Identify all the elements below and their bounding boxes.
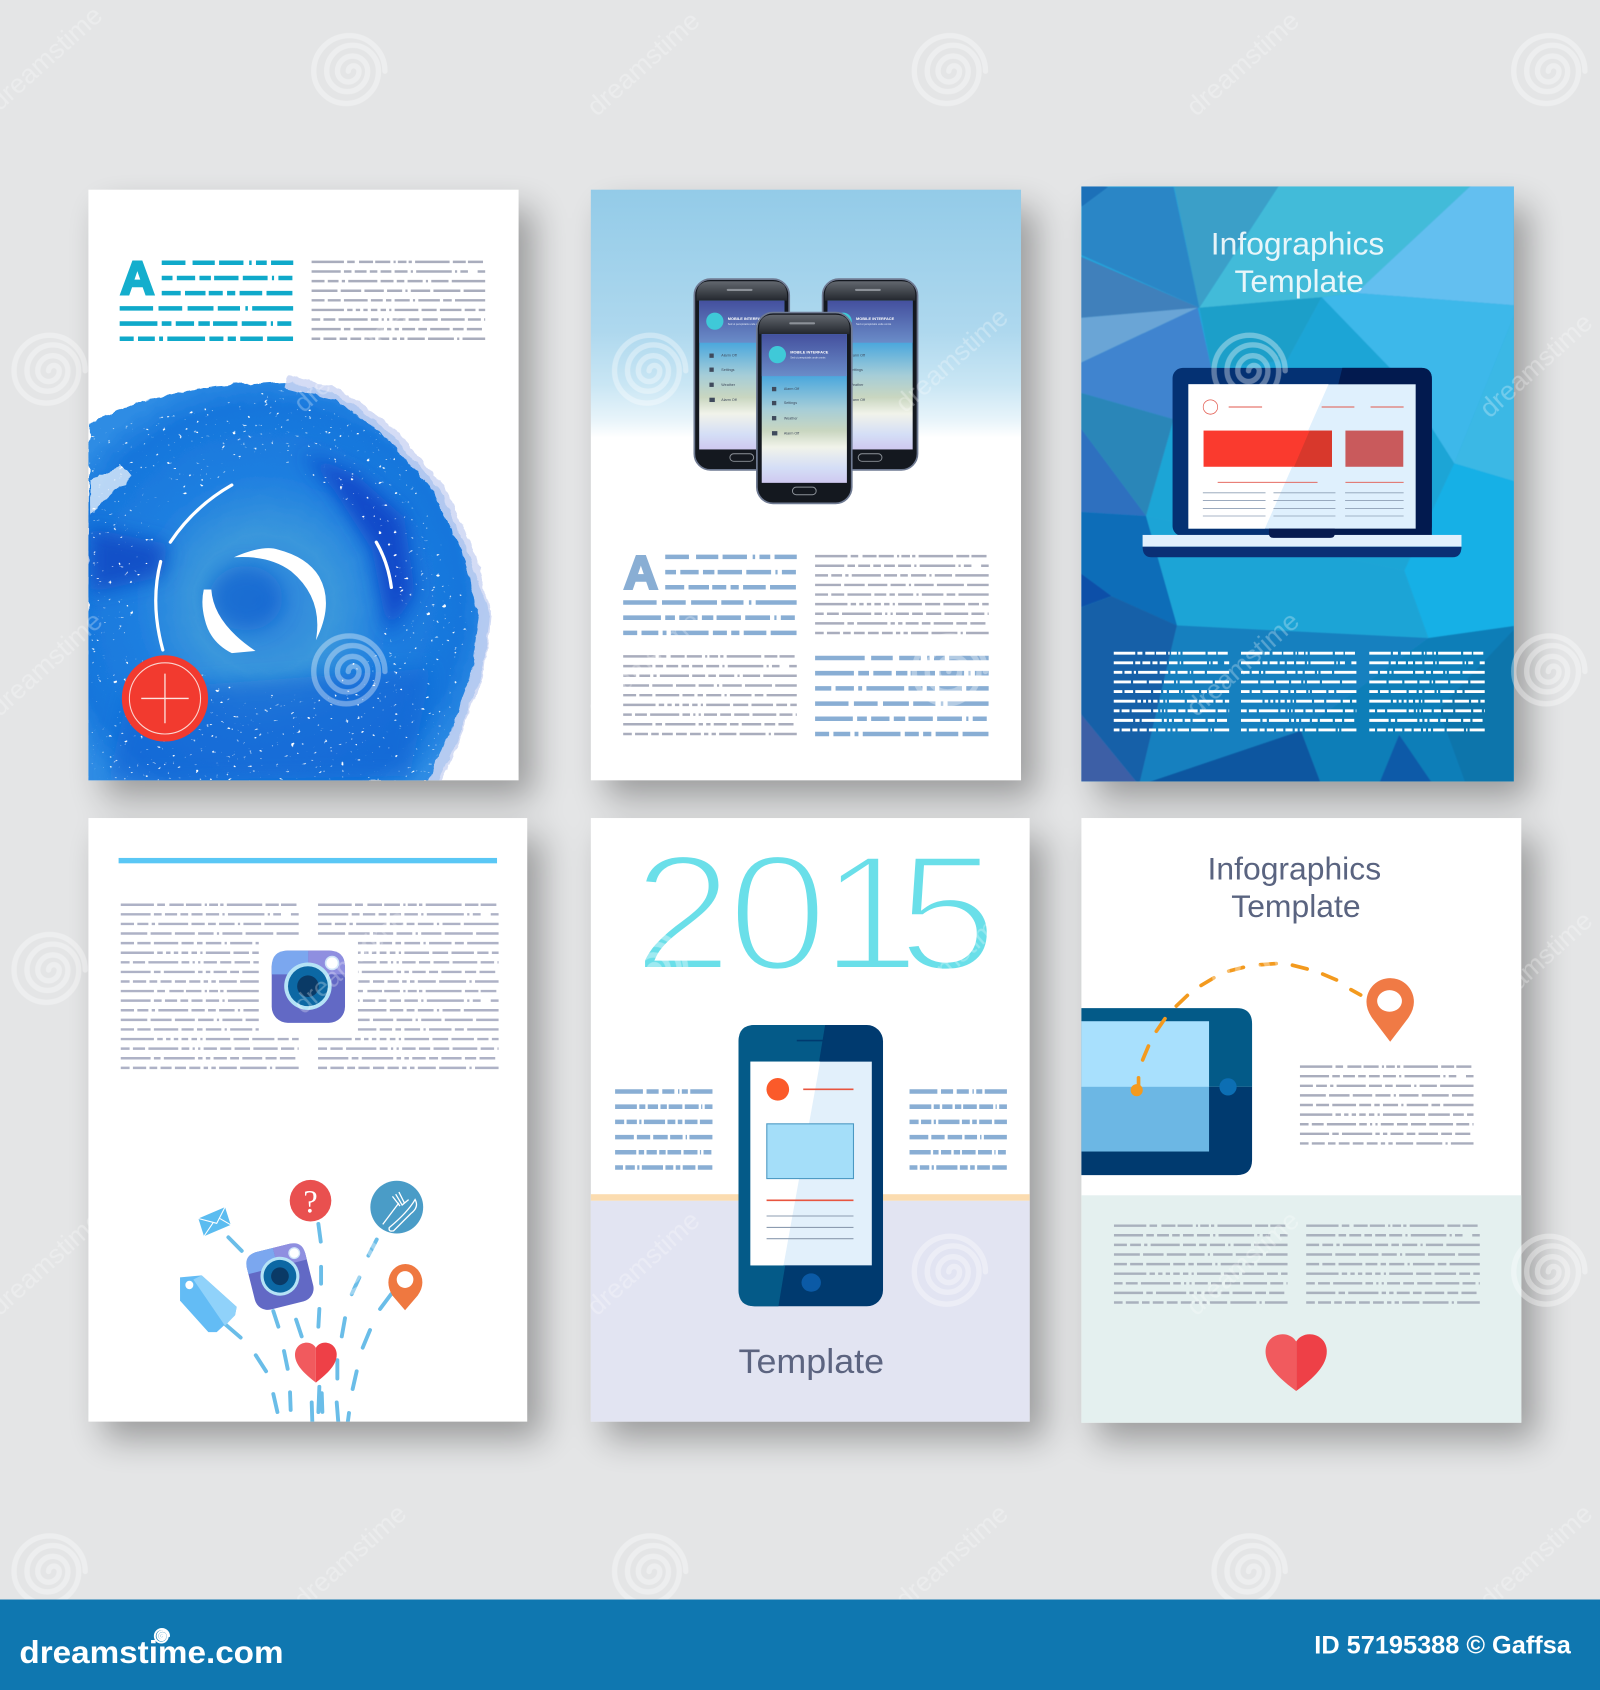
icon: red plus button <box>122 655 208 742</box>
year heading: 2015 <box>633 820 997 1006</box>
heading block with letter A <box>623 547 797 633</box>
icon: heart <box>295 1343 337 1383</box>
watermark overlay: dreamstime <box>287 302 412 418</box>
column 1 <box>1114 653 1229 730</box>
icon: question bubble: ? <box>303 1184 318 1220</box>
white brush strokes <box>91 466 326 653</box>
icon: tilted camera <box>246 1243 314 1310</box>
text block upper right <box>815 556 989 633</box>
watermark overlay: dreamstime <box>1473 1498 1598 1614</box>
low-poly background <box>1077 179 1518 785</box>
panel: polygon cover <box>1077 179 1518 785</box>
burst dashes <box>226 1224 391 1423</box>
phone right: Alarm Off <box>850 398 866 402</box>
two column text <box>121 905 499 1068</box>
accent bar <box>119 858 497 863</box>
panel: 2015 template <box>591 818 1030 1422</box>
footer bar <box>0 1599 1600 1690</box>
panel: camera article <box>88 818 527 1423</box>
icon: envelope <box>198 1207 231 1236</box>
dashed route arrow <box>1131 964 1361 1096</box>
phone center: Weather <box>784 416 798 420</box>
phone right: Settings <box>850 368 863 372</box>
icon: camera <box>272 951 345 1023</box>
heading: Infographics <box>1211 226 1384 261</box>
phone left: Sed ut perspiciatis unde omnis <box>728 322 764 326</box>
heading: Template <box>1231 889 1361 924</box>
icon burst with dashes <box>180 1180 423 1423</box>
phone center: Settings <box>784 401 797 405</box>
watermark overlay: dreamstime <box>889 302 1014 418</box>
heading block with letter A <box>120 253 293 339</box>
phone right: MOBILE INTERFACE <box>856 316 895 321</box>
text block left <box>615 1091 712 1167</box>
phone left: Weather <box>721 383 736 387</box>
phone right: Weather <box>850 383 864 387</box>
icon: heart <box>1266 1334 1327 1391</box>
panel: mobile interface <box>591 190 1021 780</box>
icon: phone <box>739 1025 883 1306</box>
phone right: Alarm Off <box>850 354 866 358</box>
phone left: Settings <box>721 368 735 372</box>
heading <box>1208 851 1381 924</box>
heading block with letter A: A <box>624 547 658 600</box>
watermark overlay: dreamstime <box>581 5 705 122</box>
watermark overlay: dreamstime <box>889 903 1014 1019</box>
phone right: Sed ut perspiciatis unde omnis <box>856 322 892 326</box>
text block lower left <box>623 656 797 734</box>
phone left <box>694 279 789 470</box>
panel: infographics template <box>1081 818 1521 1423</box>
phone center: Alarm Off <box>784 387 800 391</box>
watermark overlay: dreamstime <box>287 1498 412 1614</box>
column 2 <box>1241 653 1356 730</box>
heading <box>1211 226 1384 299</box>
footer logo: dreamstime.com <box>19 1635 284 1670</box>
body text block <box>312 262 485 339</box>
dark pigment patches <box>91 453 431 781</box>
watermark overlay: dreamstime <box>287 903 412 1019</box>
column 3 <box>1369 653 1485 730</box>
watermark overlay: dreamstime <box>1180 1205 1305 1321</box>
text block lower left <box>1114 1226 1288 1303</box>
heading: Template <box>1235 264 1364 299</box>
lower band <box>591 1201 1030 1422</box>
watermark overlay: dreamstime <box>581 605 705 722</box>
paint speckles <box>89 388 474 780</box>
heading block with letter A: A <box>120 253 154 306</box>
icon: price tag <box>180 1275 237 1332</box>
panel shadows <box>104 207 1536 1440</box>
icon: laptop <box>1143 368 1461 557</box>
watermark overlay: dreamstime <box>889 1498 1014 1614</box>
text block right <box>910 1091 1007 1167</box>
text block lower right <box>815 658 989 734</box>
icon: question bubble <box>290 1180 331 1221</box>
phone left: Alarm Off <box>721 354 738 358</box>
watermark overlay: dreamstime <box>1473 905 1598 1022</box>
phone left: MOBILE INTERFACE <box>728 316 766 321</box>
watermark overlay: dreamstime <box>1180 5 1305 122</box>
lower band <box>1081 1195 1521 1423</box>
watermark overlay: dreamstime <box>1180 605 1305 722</box>
phone center: Sed ut perspiciatis unde omnis <box>790 355 826 359</box>
icon: location pin <box>388 1264 422 1310</box>
icon: fork and knife <box>370 1181 423 1234</box>
panel: watercolor cover <box>86 190 519 785</box>
icon: tablet <box>1081 1008 1252 1175</box>
phone center: MOBILE INTERFACE <box>790 350 829 355</box>
watermark overlay: dreamstime <box>581 1205 705 1321</box>
label: Template <box>739 1343 884 1381</box>
watercolor swirl <box>86 382 489 785</box>
text columns <box>1114 653 1485 730</box>
phone center <box>757 313 852 503</box>
text block upper right <box>1300 1067 1474 1143</box>
orange strip <box>591 1194 1030 1201</box>
icon: location pin <box>1366 978 1414 1042</box>
phone right <box>823 279 918 470</box>
watermark overlay: dreamstime <box>1473 307 1598 423</box>
phone left: Alarm Off <box>721 398 738 402</box>
heading: Infographics <box>1208 851 1381 886</box>
text block lower right <box>1306 1226 1480 1303</box>
image id credit: ID 57195388 © Gaffsa <box>1314 1632 1571 1659</box>
phone center: Alarm Off <box>784 431 800 435</box>
